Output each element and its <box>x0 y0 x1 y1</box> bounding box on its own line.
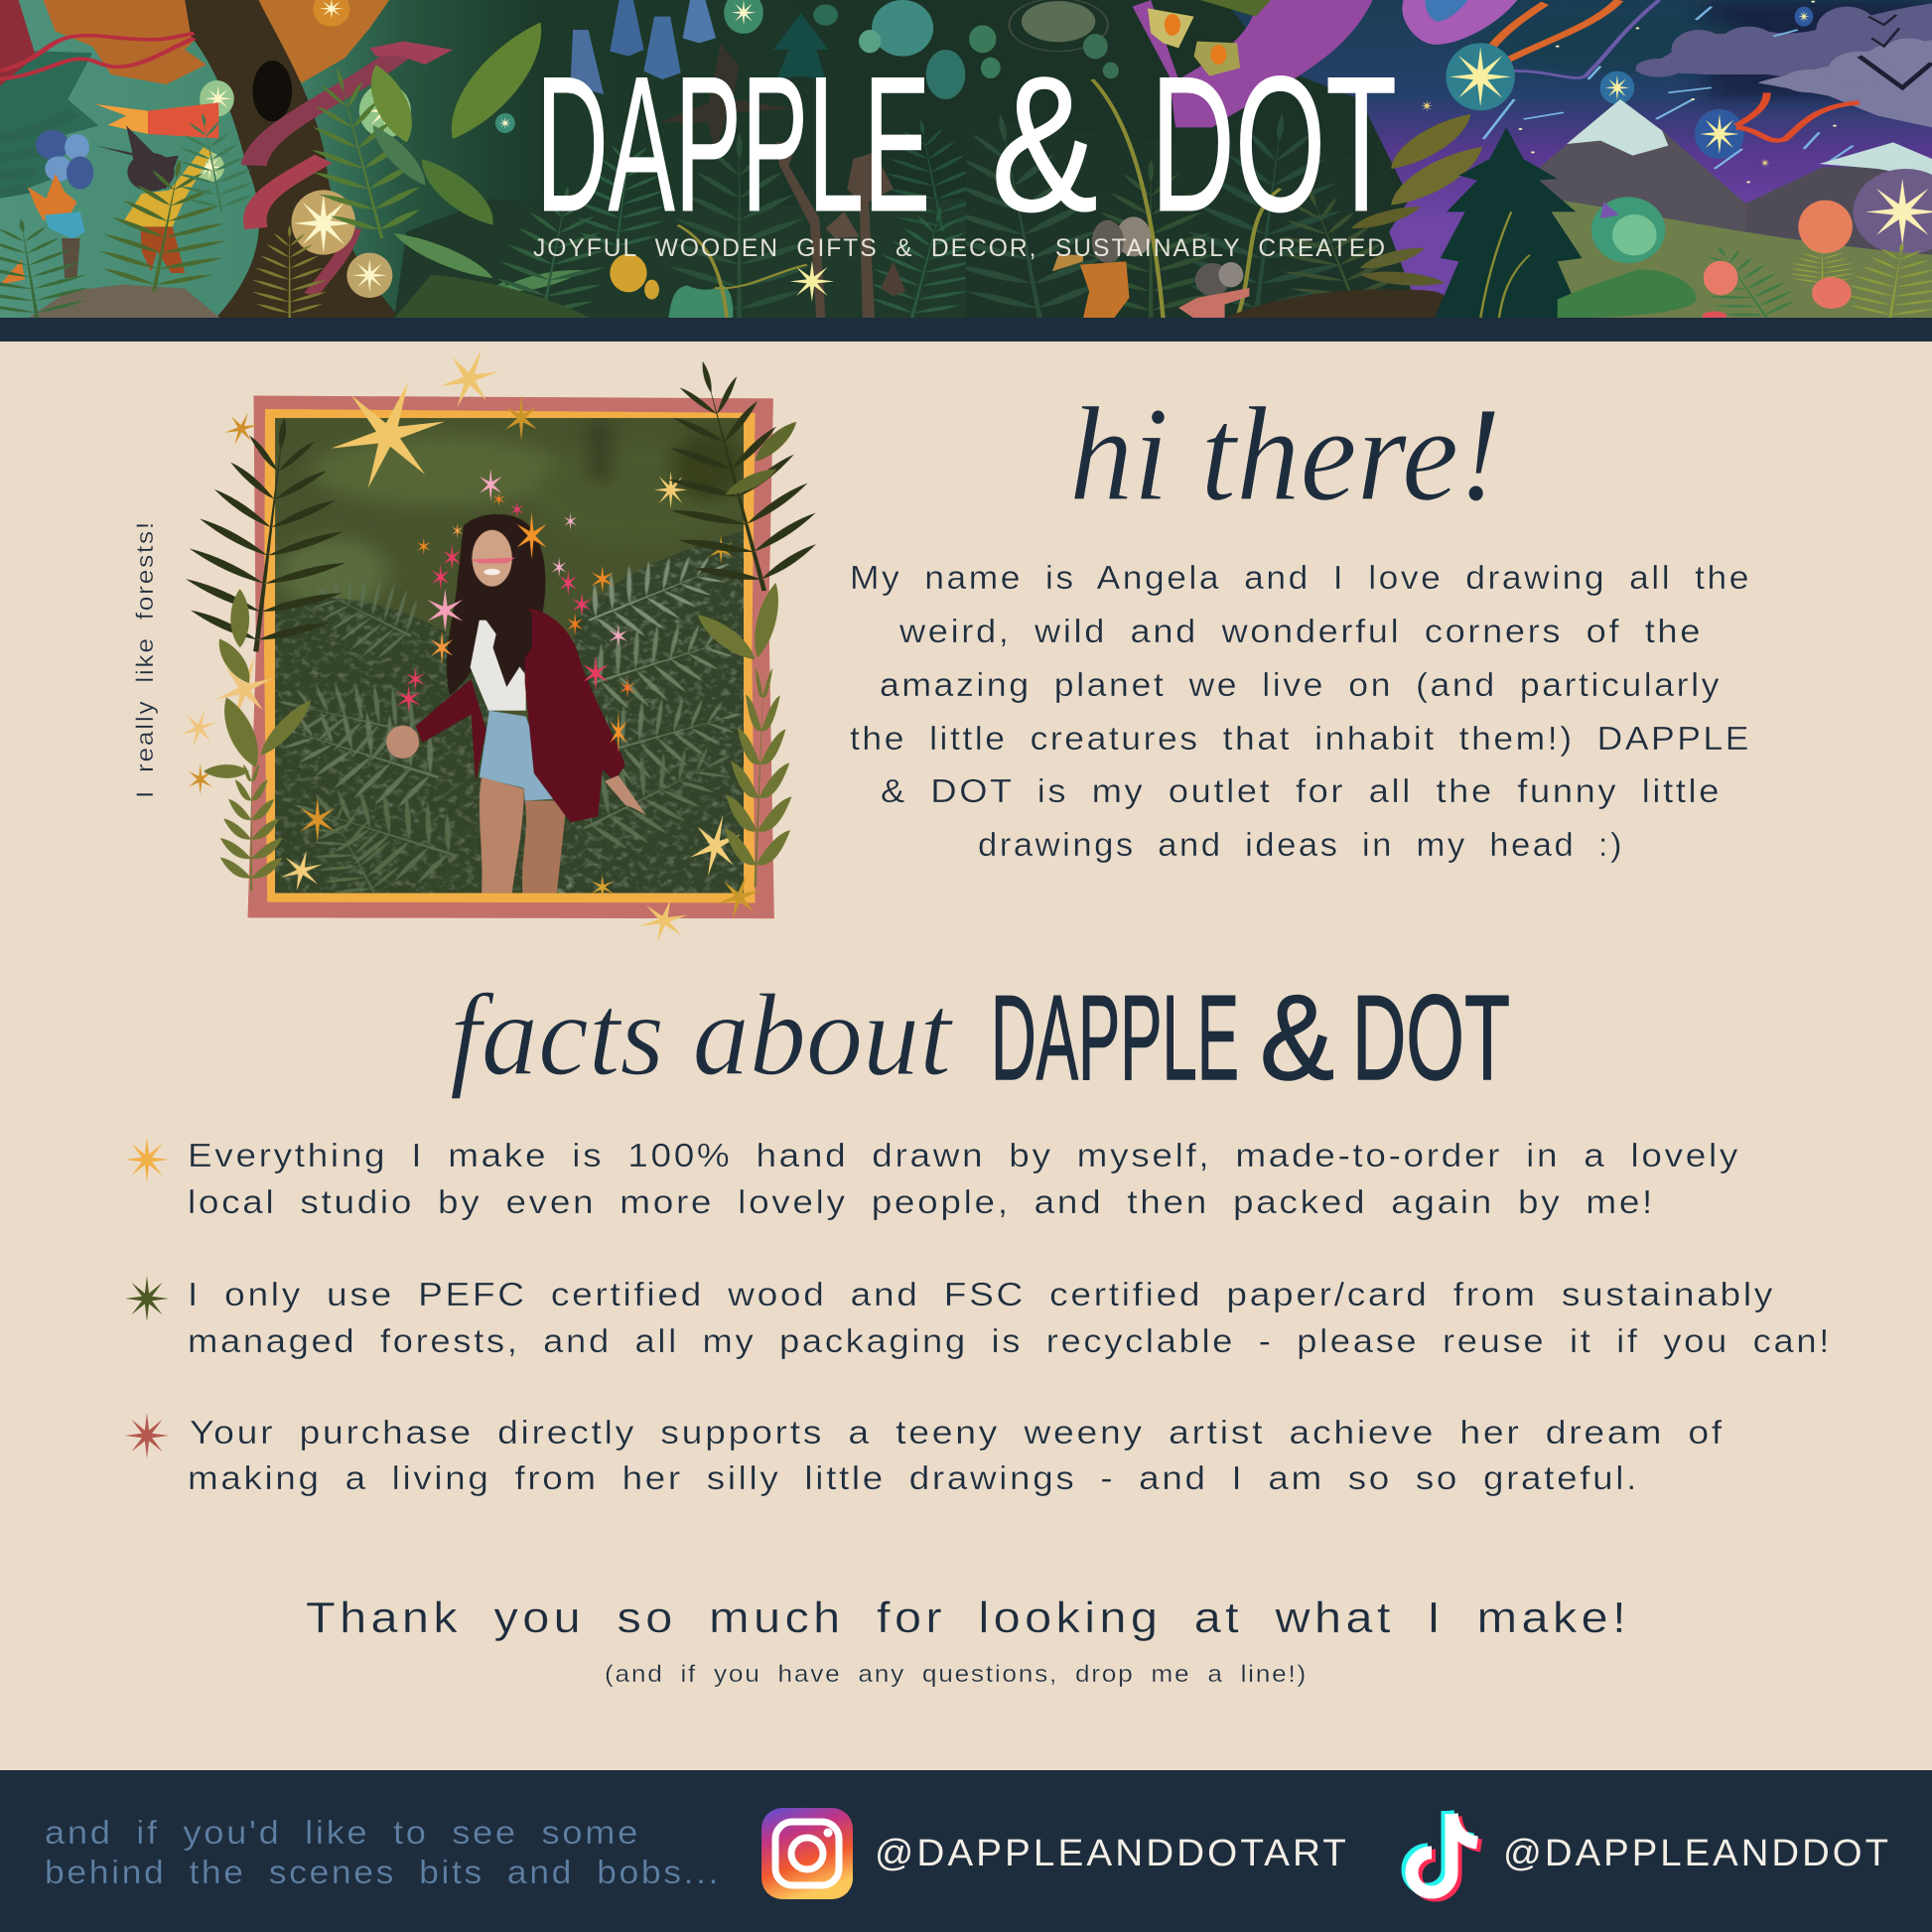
thank you line: Thank you so much for looking at what I make! <box>306 1593 1630 1642</box>
foreground plants <box>394 199 502 318</box>
fir tree <box>1435 127 1583 319</box>
flower bulbs <box>1148 8 1194 48</box>
fact 2: managed forests, and all my packaging is recyclable - please reuse it if you can! <box>188 1322 1832 1359</box>
lantern <box>1022 1 1095 42</box>
flag, balloons, fox, rabbit <box>95 102 218 138</box>
fact 3: Your purchase directly supports a teeny weeny artist achieve her dream of <box>190 1414 1725 1450</box>
navy band under banner <box>0 318 1932 342</box>
intro paragraph: drawings and ideas in my head :) <box>978 826 1624 863</box>
mushrooms, dandelion, frog <box>776 142 826 319</box>
banner tagline: JOYFUL WOODEN GIFTS & DECOR, SUSTAINABLY CREATED <box>533 234 1387 262</box>
banner title: & <box>991 37 1098 252</box>
intro paragraph: weird, wild and wonderful corners of the <box>898 613 1703 649</box>
frame stars <box>321 368 455 501</box>
mice <box>1116 216 1151 256</box>
heading: hi there: hi there! <box>1069 380 1501 529</box>
comets and stars <box>1483 7 1854 169</box>
heading: facts about Dapple & Dot: & <box>1260 970 1334 1105</box>
fact 3: making a living from her silly little drawings - and I am so so grateful. <box>188 1459 1639 1496</box>
intro paragraph: My name is Angela and I love drawing all the <box>850 559 1751 596</box>
yellow frame <box>264 409 756 902</box>
footer <box>0 1770 1932 1932</box>
icon: tiktok <box>1408 1811 1481 1895</box>
tiktok handle: @DAPPLEANDDOT <box>1503 1833 1891 1874</box>
fact 2 <box>125 1276 1832 1359</box>
halo stars <box>480 469 501 501</box>
olive leaves left <box>204 589 318 892</box>
heading: facts about Dapple & Dot: DOT <box>1352 970 1510 1105</box>
frog in orb <box>1591 197 1665 263</box>
orbs <box>1446 43 1515 110</box>
woman <box>447 514 545 695</box>
framed photo <box>182 350 816 941</box>
instagram handle: @DAPPLEANDDOTART <box>875 1833 1349 1874</box>
olive leaves right <box>691 417 802 889</box>
intro paragraph: amazing planet we live on (and particularly <box>880 666 1722 703</box>
illustration: enchanted forest, left half <box>0 0 966 318</box>
ribbons <box>1133 0 1373 127</box>
footer invitation text <box>45 1814 721 1890</box>
clover and pomegranates <box>1558 270 1697 319</box>
banner title: DOT <box>1151 37 1397 252</box>
footer invitation text: behind the scenes bits and bobs... <box>45 1854 721 1890</box>
intro paragraph: the little creatures that inhabit them!) DAPPLE <box>850 720 1751 757</box>
mountains <box>1539 99 1745 232</box>
fact 1: local studio by even more lovely people, and then packed again by me! <box>188 1183 1655 1220</box>
fact 3 <box>125 1413 1725 1496</box>
dark plants <box>1352 231 1412 290</box>
dark fern leaves <box>178 410 362 658</box>
photo: woman in forest <box>257 418 756 908</box>
icon: green star bullet <box>125 1276 169 1321</box>
heading: facts about Dapple & Dot: DAPPLE <box>991 970 1239 1105</box>
side note: I really like forests: I really like forests! <box>132 520 159 798</box>
fact 2: I only use PEFC certified wood and FSC certified paper/card from sustainably <box>188 1276 1775 1312</box>
footer invitation text: and if you'd like to see some <box>45 1814 640 1851</box>
heading: facts about Dapple & Dot <box>450 970 1510 1105</box>
intro paragraph <box>850 559 1751 863</box>
header banner illustration <box>0 0 1932 326</box>
fact 1 <box>125 1137 1740 1220</box>
icon: red star bullet <box>125 1413 169 1458</box>
questions note: (and if you have any questions, drop me a line!) <box>605 1661 1308 1688</box>
bellflowers and lanterns <box>570 30 604 94</box>
illustration: night sky and mountains, right half <box>966 0 1932 318</box>
pink frame <box>247 396 774 918</box>
intro paragraph: & DOT is my outlet for all the funny little <box>881 772 1722 809</box>
heading: facts about Dapple & Dot: facts about <box>450 970 954 1100</box>
moth <box>659 44 792 144</box>
pale stars in photo <box>654 471 687 508</box>
orbs <box>359 83 411 138</box>
fact 1: Everything I make is 100% hand drawn by myself, made-to-order in a lovely <box>188 1137 1740 1173</box>
clouds <box>1634 3 1932 77</box>
icon: yellow star bullet <box>125 1137 169 1182</box>
icon: instagram <box>761 1808 853 1899</box>
banner title: DAPPLE <box>536 37 930 252</box>
